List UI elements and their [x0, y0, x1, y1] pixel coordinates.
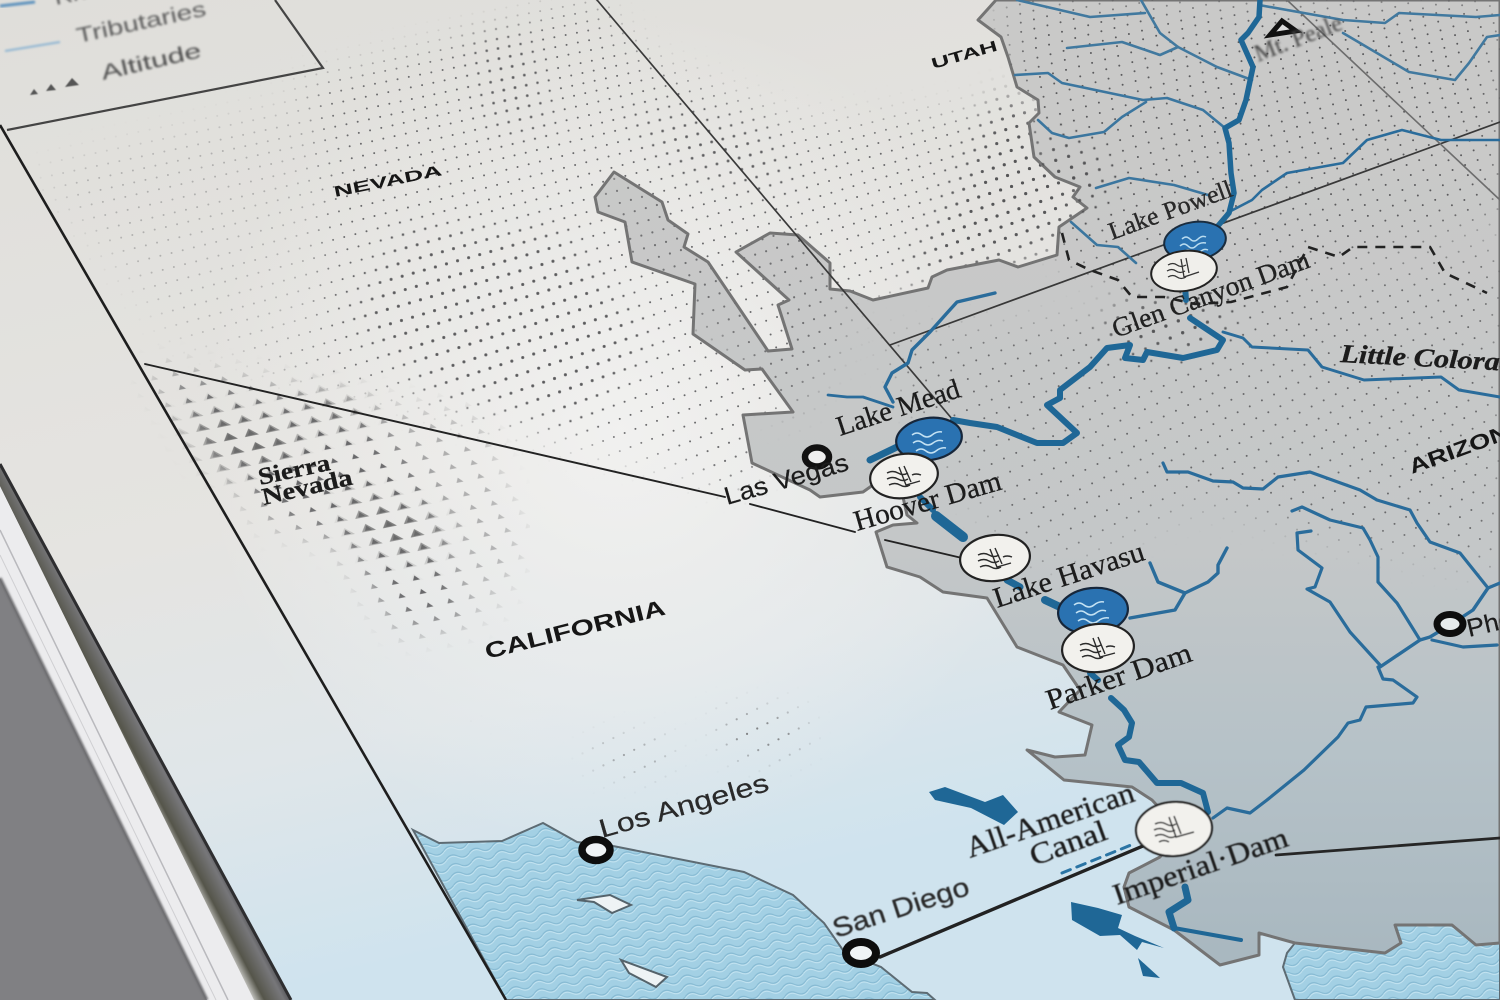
state label: Nevada: NEVADA — [332, 162, 444, 201]
Gulf of California — [1283, 925, 1500, 1000]
Salton Sea — [929, 787, 1018, 825]
dam icon: Parker Dam — [1060, 620, 1136, 676]
dam icon: Glen Canyon Dam — [1149, 247, 1219, 295]
label: Glen Canyon Dam: Glen Canyon Dam — [1108, 244, 1314, 344]
halftone triangles: Sierra Nevada large — [174, 385, 455, 575]
city marker: Los Angeles — [582, 840, 610, 860]
Channel Islands — [577, 895, 667, 987]
city label: Los Angeles: Los Angeles — [595, 767, 772, 844]
label: Parker Dam: Parker Dam — [1042, 637, 1196, 717]
region label: Sierra Nevada: Nevada — [260, 465, 355, 511]
Colorado River Basin land — [595, 0, 1500, 965]
Mount Peale marker — [1270, 21, 1296, 35]
legend: rivers swatch — [0, 2, 35, 6]
legend: tributaries swatch — [5, 42, 60, 51]
label: Hoover Dam: Hoover Dam — [850, 465, 1005, 538]
halftone dots: scattered desert — [582, 438, 811, 788]
dam icon: Imperial Dam — [1134, 799, 1214, 859]
lake icon: Lake Powell — [1162, 218, 1228, 264]
state label: California: CALIFORNIA — [482, 595, 668, 664]
label: Imperial Dam: Imperial·Dam — [1109, 821, 1292, 912]
halftone dots: darker terrain — [338, 24, 1078, 436]
sheet edge shadow — [0, 464, 291, 1000]
dam icon: Davis Dam — [958, 531, 1032, 585]
state label: Utah: UTAH — [929, 38, 999, 73]
label: Lake Mead: Lake Mead — [833, 374, 964, 443]
region label: Sierra Nevada: Sierra — [256, 450, 333, 491]
city label: Las Vegas: Las Vegas — [721, 449, 852, 511]
halftone triangles: Sierra Nevada small — [145, 356, 530, 643]
lake icon: Lake Havasu — [1056, 584, 1130, 638]
halftone dots on basin — [604, 0, 1500, 584]
dashed boundary near Glen Canyon — [1062, 233, 1487, 304]
city marker: San Diego — [846, 942, 876, 964]
main Colorado River — [870, 0, 1260, 940]
tributary rivers — [828, 0, 1500, 818]
stacked page edges — [0, 464, 292, 1000]
city label: San Diego: San Diego — [829, 871, 973, 944]
label: All-American Canal: Canal — [1025, 814, 1112, 873]
map frame — [0, 125, 506, 1000]
Baja lakes — [1071, 902, 1164, 978]
Pacific Ocean — [413, 823, 935, 1000]
label: All-American Canal: All-American — [962, 776, 1139, 865]
dam icon: Hoover Dam — [867, 449, 941, 503]
legend box — [0, 0, 323, 130]
region label: Sierra Nevada — [256, 450, 355, 511]
legend: tributaries label: Tributaries — [74, 0, 208, 48]
label: Mt. Peale: Mt. Peale — [1251, 10, 1346, 68]
lake icon: Lake Mead — [893, 414, 965, 464]
legend: altitude swatch — [30, 78, 79, 95]
legend: altitude label: Altitude — [99, 40, 204, 85]
label: Lake Powell: Lake Powell — [1105, 176, 1236, 246]
halftone dots: Nevada and Utah terrain — [40, 0, 1077, 490]
label: Lake Havasu: Lake Havasu — [989, 536, 1148, 615]
city marker: Las Vegas — [805, 448, 829, 466]
label: Little Colorado: Little Colorado — [1339, 339, 1500, 378]
city marker: Phoenix — [1437, 614, 1463, 634]
